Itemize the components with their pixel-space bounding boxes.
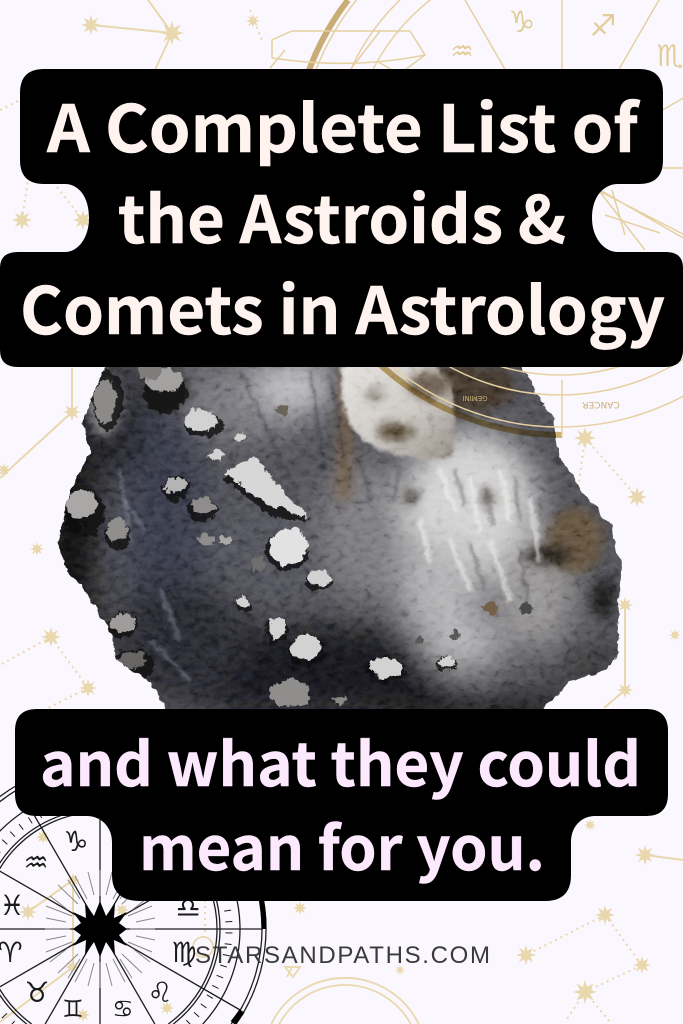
website footer: STARSANDPATHS.COM [195,942,490,969]
starburst rays [45,870,155,988]
black zodiac wheel [0,763,266,1024]
title banner [0,69,683,367]
asteroid rocks [64,360,532,708]
title text [20,77,665,353]
zodiac glyphs: ♋︎ [112,995,134,1023]
asteroid ridges [120,370,540,680]
gold zodiac glyphs: ♑︎ [509,5,535,40]
zodiac glyphs: ♍︎ [171,936,197,969]
asteroid [58,367,622,709]
gold zodiac glyphs: ♒︎ [450,37,474,67]
starburst center [73,901,127,957]
gold zodiac wheel [270,0,683,437]
zodiac glyphs: ♊︎ [62,995,84,1023]
zodiac glyphs: ♎︎ [175,891,201,924]
gold zodiac glyphs [450,5,683,409]
zodiac glyphs: ♉︎ [24,976,50,1009]
asteroid texture [58,367,622,709]
subtitle text [40,717,641,888]
zodiac glyphs: ♒︎ [23,846,49,879]
asteroid tonal shading [58,367,618,709]
title text: the Astroids & [118,168,566,262]
gold zodiac glyphs: ♐︎ [590,9,616,44]
zodiac glyphs: ♓︎ [0,889,25,922]
subtitle banner [15,709,668,901]
zodiac glyphs: ♌︎ [147,976,173,1009]
gold zodiac glyphs: CANCER [582,399,620,409]
title text: A Complete List of [46,77,641,171]
gold zodiac glyphs: GEMINI [462,394,488,402]
zodiac glyphs [0,825,201,1023]
title text: Comets in Astrology [20,259,665,353]
gold zodiac glyphs: ♏︎ [657,39,683,74]
asteroid bump [342,350,455,459]
subtitle text: and what they could [40,717,641,804]
subtitle text: mean for you. [139,801,545,888]
zodiac glyphs: ♑︎ [63,825,89,858]
